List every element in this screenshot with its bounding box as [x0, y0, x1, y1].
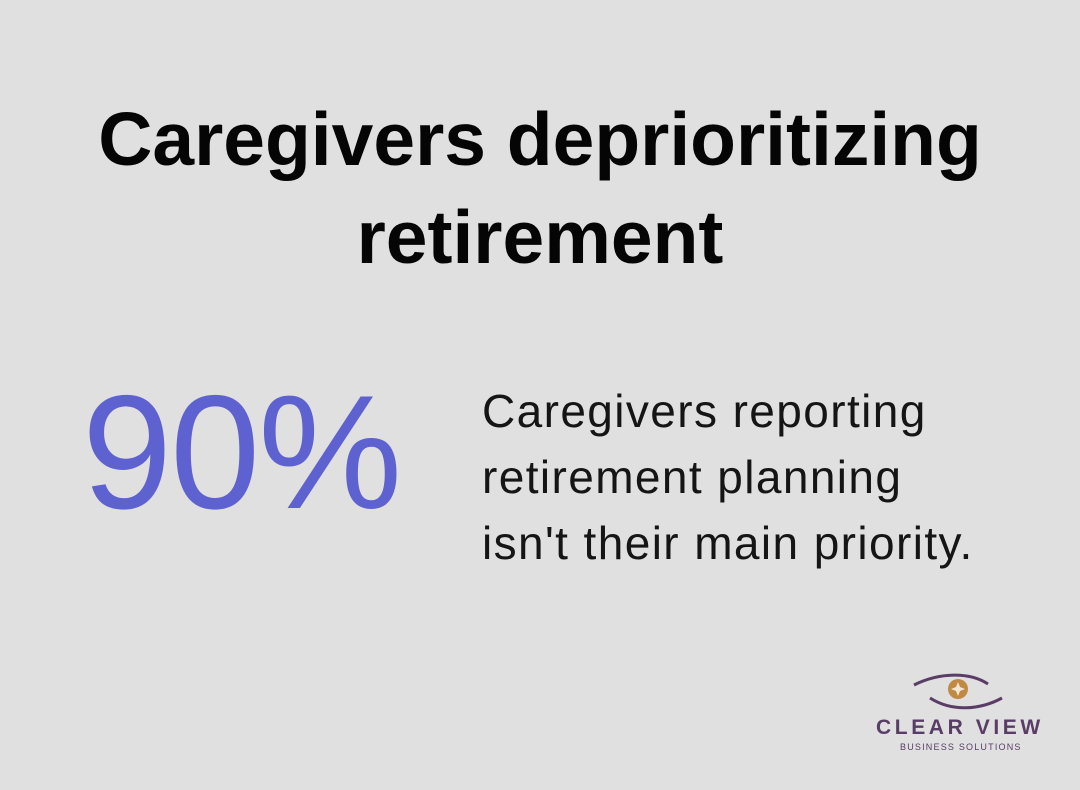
- description text: Caregivers reporting: [482, 385, 927, 437]
- title: retirement: [357, 195, 723, 279]
- icon: eye: [914, 675, 1002, 708]
- logo text: CLEAR VIEW: [876, 716, 1044, 739]
- description text: retirement planning: [482, 451, 902, 503]
- logo text: [876, 716, 1044, 752]
- description text: isn't their main priority.: [482, 517, 974, 569]
- title: [98, 97, 982, 279]
- logo: Clear View: [876, 674, 1044, 752]
- big stat: 90%: 90%: [82, 362, 400, 543]
- title: Caregivers deprioritizing: [98, 97, 982, 181]
- logo text: BUSINESS SOLUTIONS: [900, 742, 1022, 752]
- description text: [482, 385, 974, 569]
